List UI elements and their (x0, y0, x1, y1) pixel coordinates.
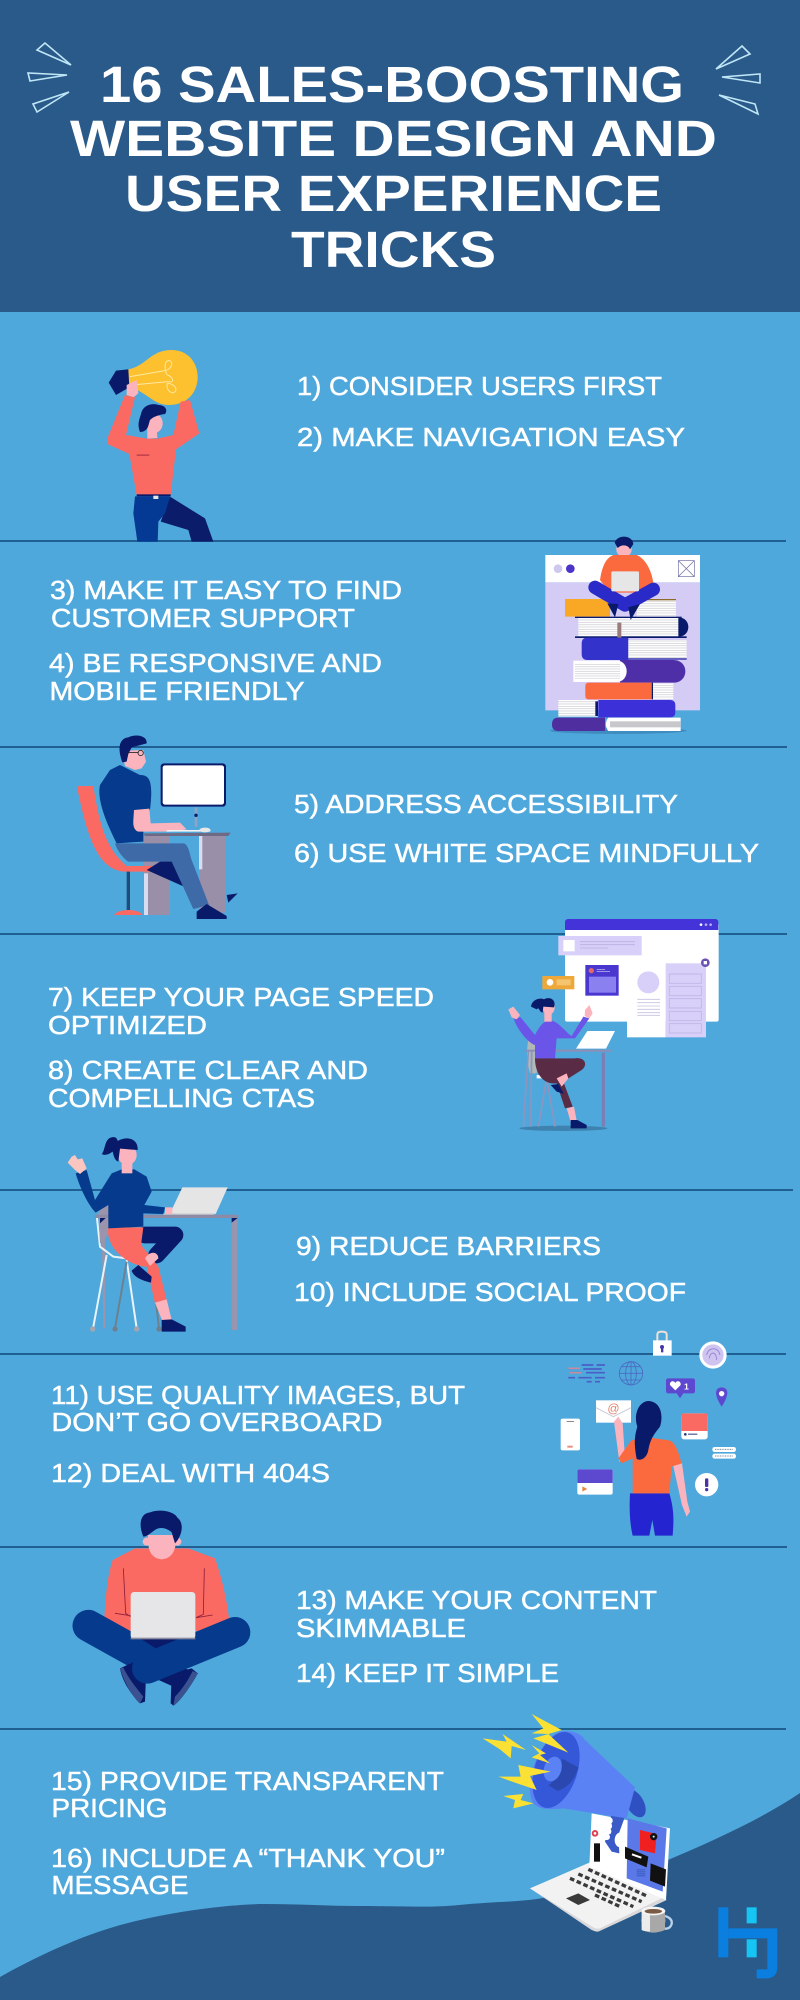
header band (0, 0, 800, 312)
illustration: person on stack of books (545, 537, 700, 734)
tips 11 and 12 (51, 1380, 465, 1488)
tips 15 and 16: PRICING (52, 1793, 168, 1823)
tips 11 and 12: DON’T GO OVERBOARD (52, 1407, 382, 1437)
tips 7 and 8: OPTIMIZED (48, 1010, 207, 1040)
tips 1 and 2: 2) MAKE NAVIGATION EASY (297, 422, 685, 452)
illustration: man sitting cross-legged with laptop (88, 1511, 235, 1706)
title (70, 56, 717, 278)
illustration: woman surrounded by web icons (561, 1332, 736, 1536)
tips 9 and 10: 9) REDUCE BARRIERS (296, 1231, 601, 1261)
tips 5 and 6 (294, 789, 759, 868)
tips 9 and 10: 10) INCLUDE SOCIAL PROOF (294, 1277, 686, 1307)
burst icon: left (28, 43, 71, 112)
tips 11 and 12: 11) USE QUALITY IMAGES, BUT (51, 1380, 465, 1410)
tips 15 and 16: 16) INCLUDE A “THANK YOU” (51, 1843, 445, 1873)
tips 1 and 2 (297, 371, 685, 452)
burst icon: right (716, 46, 760, 114)
tips 15 and 16 (51, 1766, 445, 1900)
title: WEBSITE DESIGN AND (70, 110, 717, 167)
tips 1 and 2: 1) CONSIDER USERS FIRST (297, 371, 662, 401)
illustration: woman seated with laptop (68, 1137, 238, 1332)
tips 7 and 8: COMPELLING CTAS (48, 1083, 315, 1113)
tips 7 and 8 (48, 982, 434, 1113)
illustration: woman surrounded by web icons: 1 (684, 1381, 689, 1391)
illustration: megaphone and laptop (483, 1714, 672, 1933)
illustration: web page window with woman at laptop (508, 919, 719, 1131)
tips 9 and 10 (294, 1231, 686, 1307)
tips 5 and 6: 5) ADDRESS ACCESSIBILITY (294, 789, 678, 819)
logo: HJ mark (718, 1907, 777, 1978)
tips 15 and 16: MESSAGE (52, 1870, 188, 1900)
tips 7 and 8: 8) CREATE CLEAR AND (48, 1055, 368, 1085)
tips 13 and 14 (296, 1585, 657, 1688)
tips 11 and 12: 12) DEAL WITH 404S (51, 1458, 330, 1488)
bottom wave (0, 1793, 800, 2000)
title: USER EXPERIENCE (125, 165, 662, 222)
illustration: man at desktop computer (77, 736, 238, 919)
tips 3 and 4 (49, 575, 402, 706)
tips 13 and 14: 13) MAKE YOUR CONTENT (296, 1585, 657, 1615)
title: TRICKS (291, 221, 496, 278)
tips 3 and 4: 4) BE RESPONSIVE AND (49, 648, 382, 678)
tips 15 and 16: 15) PROVIDE TRANSPARENT (51, 1766, 444, 1796)
tips 13 and 14: 14) KEEP IT SIMPLE (296, 1658, 559, 1688)
illustration: man lifting light bulb (107, 350, 213, 542)
tips 5 and 6: 6) USE WHITE SPACE MINDFULLY (294, 838, 759, 868)
illustration: woman surrounded by web icons: @ (607, 1401, 620, 1415)
tips 3 and 4: CUSTOMER SUPPORT (51, 603, 355, 633)
title: 16 SALES-BOOSTING (100, 56, 684, 113)
tips 13 and 14: SKIMMABLE (296, 1613, 466, 1643)
tips 3 and 4: 3) MAKE IT EASY TO FIND (50, 575, 402, 605)
tips 7 and 8: 7) KEEP YOUR PAGE SPEED (48, 982, 434, 1012)
tips 3 and 4: MOBILE FRIENDLY (50, 676, 304, 706)
